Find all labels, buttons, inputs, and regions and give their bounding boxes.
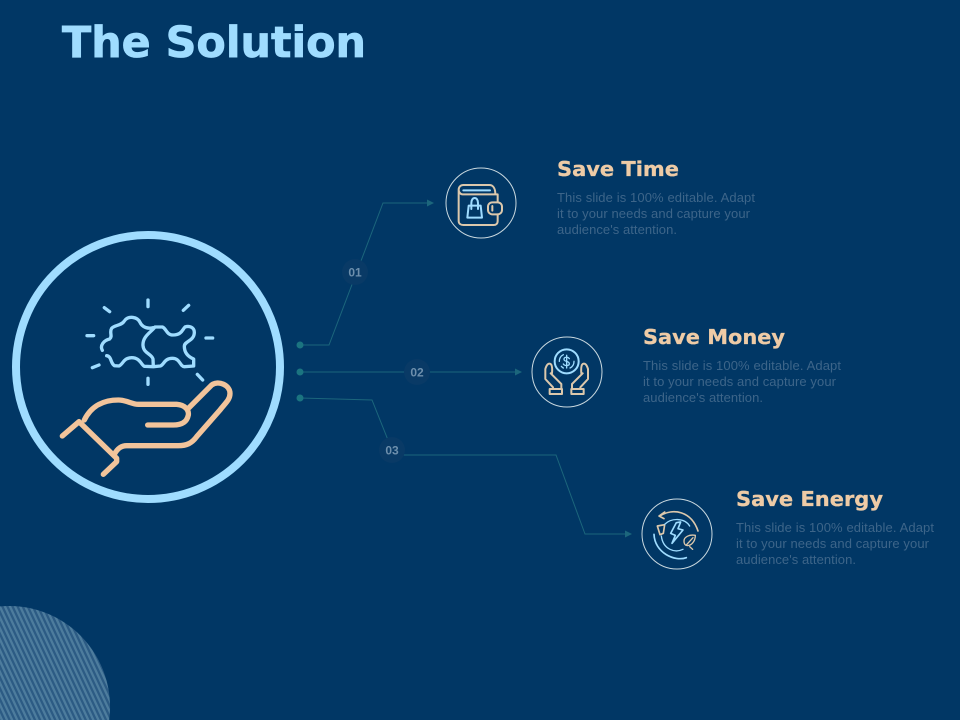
icon: energy cycle with bolt and leaf	[642, 499, 712, 569]
connector 02: 02	[410, 366, 424, 380]
text block: Save Money: This slide is 100% editable. Adapt	[643, 358, 841, 373]
text block: Save Time: it to your needs and capture your	[557, 206, 751, 221]
icon: hands holding coin	[532, 337, 602, 407]
text block: Save Money: it to your needs and capture your	[643, 374, 837, 389]
text block: Save Energy: audience's attention.	[736, 552, 856, 567]
connector 01: 01	[348, 266, 362, 280]
title: The Solution	[62, 18, 366, 68]
decorative striped circle	[0, 606, 110, 720]
text block: Save Energy: Save Energy	[736, 487, 883, 511]
icon: wallet with shopping bag	[446, 168, 516, 238]
text block: Save Energy: it to your needs and capture your	[736, 536, 930, 551]
text block: Save Time: This slide is 100% editable. Adapt	[557, 190, 755, 205]
text block: Save Time	[557, 157, 755, 237]
connector 01	[296, 200, 434, 348]
connector 03	[296, 394, 632, 538]
text block: Save Energy	[736, 487, 934, 567]
text block: Save Time: Save Time	[557, 157, 679, 181]
icon: hand holding puzzle pieces in a circle	[16, 235, 280, 499]
text block: Save Time: audience's attention.	[557, 222, 677, 237]
connector 02	[296, 359, 522, 385]
connector 03: 03	[385, 444, 399, 458]
text block: Save Energy: This slide is 100% editable. Adapt	[736, 520, 934, 535]
text block: Save Money	[643, 325, 841, 405]
text block: Save Money: audience's attention.	[643, 390, 763, 405]
text block: Save Money: Save Money	[643, 325, 785, 349]
